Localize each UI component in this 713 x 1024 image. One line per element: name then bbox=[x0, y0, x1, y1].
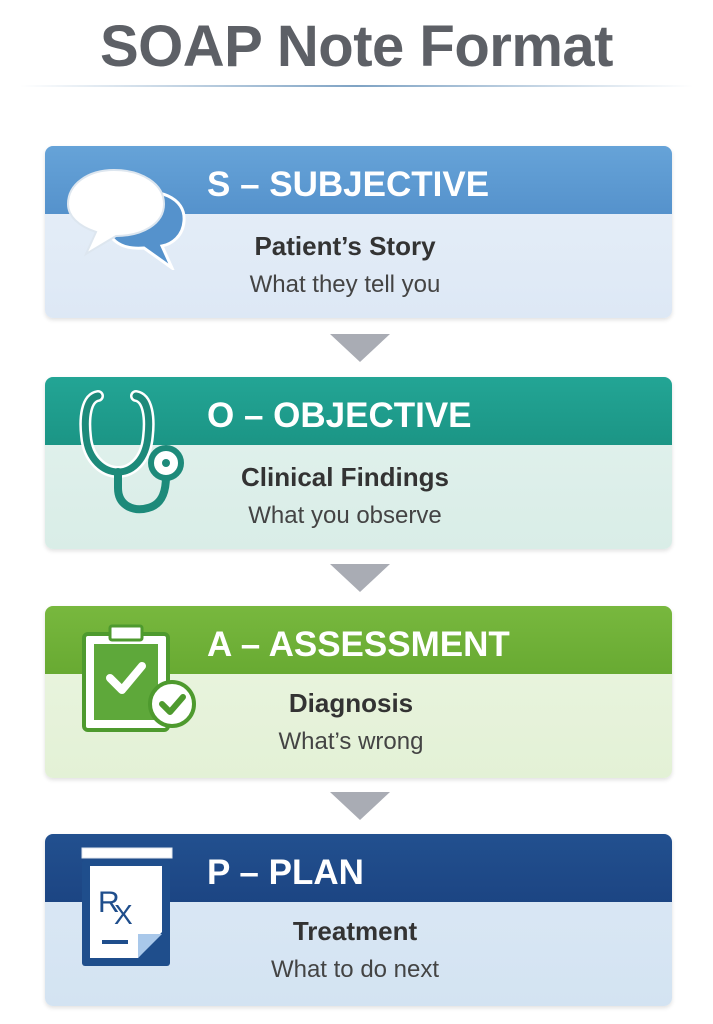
text: subjective bbox=[250, 231, 440, 298]
icon: prescription bbox=[82, 848, 172, 966]
icon: speech bubbles bbox=[67, 169, 186, 270]
panel: objective bbox=[45, 377, 672, 549]
header: assessment: A – ASSESSMENT bbox=[207, 625, 510, 664]
header: subjective bbox=[45, 146, 672, 214]
icon: clipboard check bbox=[82, 624, 196, 732]
text: objective bbox=[241, 462, 449, 529]
panel: subjective bbox=[45, 146, 672, 318]
text: subjective: What they tell you bbox=[250, 271, 440, 298]
panel: assessment bbox=[45, 606, 672, 778]
text: assessment bbox=[278, 688, 423, 755]
text: subjective: Patient’s Story bbox=[254, 231, 436, 261]
icon: prescription: X bbox=[114, 899, 133, 930]
header: plan: P – PLAN bbox=[207, 853, 364, 892]
title: SOAP Note Format bbox=[100, 14, 613, 79]
text: plan: What to do next bbox=[271, 956, 439, 983]
icon: prescription: R bbox=[98, 886, 120, 919]
header: objective bbox=[45, 377, 672, 445]
panel: plan bbox=[45, 834, 672, 1006]
text: objective: Clinical Findings bbox=[241, 462, 449, 492]
text: objective: What you observe bbox=[248, 502, 442, 529]
arrow bbox=[330, 792, 390, 820]
text: plan: Treatment bbox=[293, 916, 417, 946]
text: assessment: What’s wrong bbox=[279, 728, 423, 755]
header: objective: O – OBJECTIVE bbox=[207, 396, 472, 435]
header: assessment bbox=[45, 606, 672, 674]
header: plan bbox=[45, 834, 672, 902]
icon: stethoscope bbox=[79, 390, 184, 514]
header: subjective: S – SUBJECTIVE bbox=[207, 165, 489, 204]
arrow bbox=[330, 334, 390, 362]
text: assessment: Diagnosis bbox=[289, 688, 413, 718]
text: plan bbox=[271, 916, 439, 983]
arrow bbox=[330, 564, 390, 592]
